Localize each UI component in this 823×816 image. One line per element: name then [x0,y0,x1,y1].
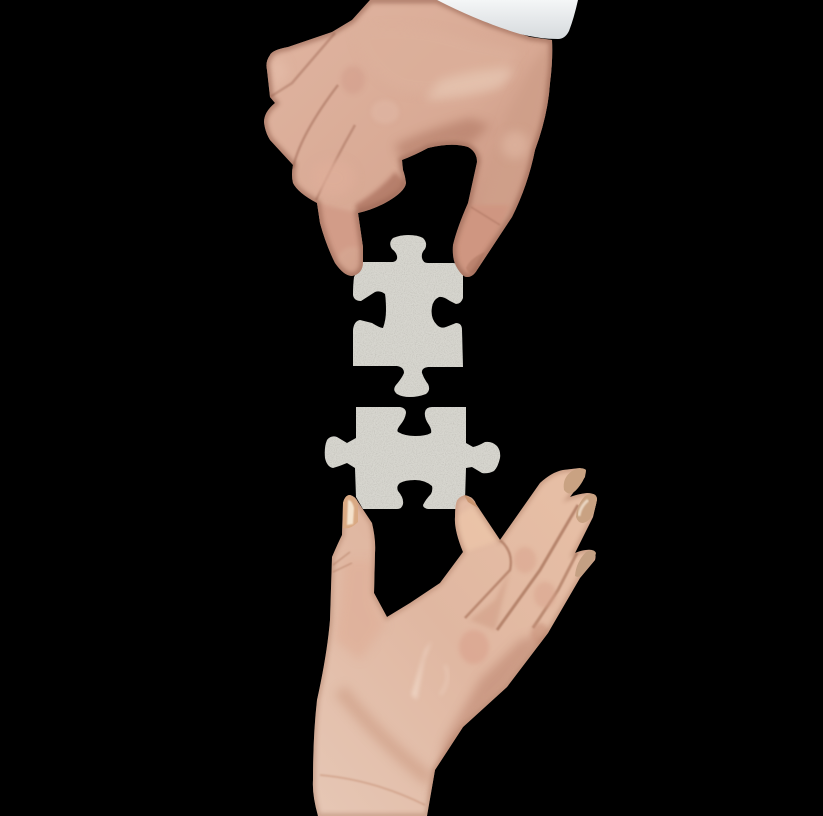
puzzle piece: bottom [325,407,500,509]
hand: bottom (woman's hand) [313,468,597,816]
inner edge shadow [264,0,552,277]
hand base [264,0,552,277]
illustration: two hands joining puzzle pieces [264,0,597,816]
hand base [313,468,597,816]
inner edge shadow [313,468,597,816]
puzzle piece: top [353,235,463,397]
hand shading and finger details [313,468,597,816]
finger gaps [465,540,511,618]
fingernails [343,468,597,577]
hand: top (man's hand with cuff) [264,0,552,277]
shirt cuff [437,0,578,39]
hand shading and finger details [264,0,552,277]
